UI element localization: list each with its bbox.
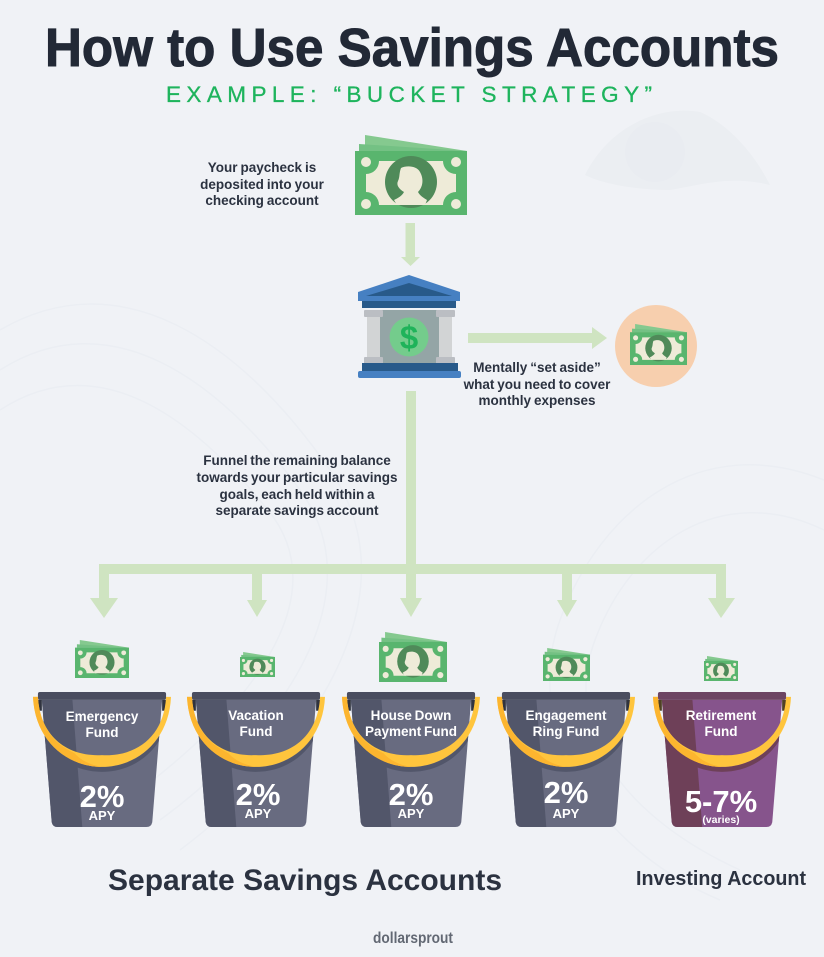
bucket: vacation fund: APY	[245, 806, 272, 821]
bucket: vacation fund: Vacation	[228, 708, 284, 723]
bucket: emergency fund: Emergency	[66, 709, 139, 724]
bucket: vacation fund: Fund	[240, 724, 272, 739]
bucket: engagement ring fund: APY	[553, 806, 580, 821]
expenses text: what you need to cover	[463, 377, 611, 392]
bucket: vacation fund: 2%	[236, 777, 280, 812]
bucket: house down payment fund: Payment Fund	[365, 724, 457, 739]
icon: expenses circle with bill	[615, 305, 697, 387]
label: separate savings accounts: Separate Savings Accounts	[108, 864, 502, 897]
title: How to Use Savings Accounts	[45, 18, 779, 78]
bucket: house down payment fund: APY	[398, 806, 425, 821]
funnel arrows	[90, 391, 735, 618]
icon: bank	[358, 275, 461, 378]
icon: paycheck bill	[355, 135, 467, 215]
bucket: emergency fund: 2%	[80, 779, 124, 814]
arrow: bill to bank	[401, 223, 420, 266]
bucket: emergency fund: APY	[89, 808, 116, 823]
subtitle: EXAMPLE: “BUCKET STRATEGY”	[166, 82, 652, 107]
bucket: retirement fund: (varies)	[702, 814, 740, 826]
bucket: house down payment fund	[342, 632, 480, 827]
expenses text: Mentally “set aside”	[473, 360, 601, 375]
icon: bank: $	[400, 319, 418, 356]
bucket: house down payment fund: House Down	[371, 708, 451, 723]
label: investing account: Investing Account	[636, 868, 806, 890]
bucket: retirement fund	[653, 656, 791, 827]
funnel text: goals, each held within a	[219, 487, 375, 502]
bucket: emergency fund: Fund	[86, 725, 118, 740]
logo: dollarsprout	[373, 930, 453, 947]
bucket: house down payment fund: 2%	[389, 777, 433, 812]
expenses text: monthly expenses	[478, 393, 596, 408]
bucket: engagement ring fund: Engagement	[525, 708, 607, 723]
bucket: engagement ring fund	[497, 648, 635, 827]
funnel text: Funnel the remaining balance	[203, 453, 391, 468]
bucket: engagement ring fund: 2%	[544, 775, 588, 810]
arrow: bank to expenses	[468, 327, 607, 349]
bucket: retirement fund: Retirement	[686, 708, 757, 723]
funnel text: separate savings account	[215, 503, 379, 518]
funnel text: towards your particular savings	[196, 470, 398, 485]
paycheck text: checking account	[205, 193, 319, 208]
bucket: vacation fund	[187, 652, 325, 827]
bucket: retirement fund: 5-7%	[685, 784, 757, 819]
bucket: engagement ring fund: Ring Fund	[533, 724, 599, 739]
bucket: retirement fund: Fund	[704, 724, 738, 739]
bucket: emergency fund	[33, 640, 171, 827]
paycheck text: Your paycheck is	[208, 160, 316, 175]
paycheck text: deposited into your	[200, 177, 325, 192]
